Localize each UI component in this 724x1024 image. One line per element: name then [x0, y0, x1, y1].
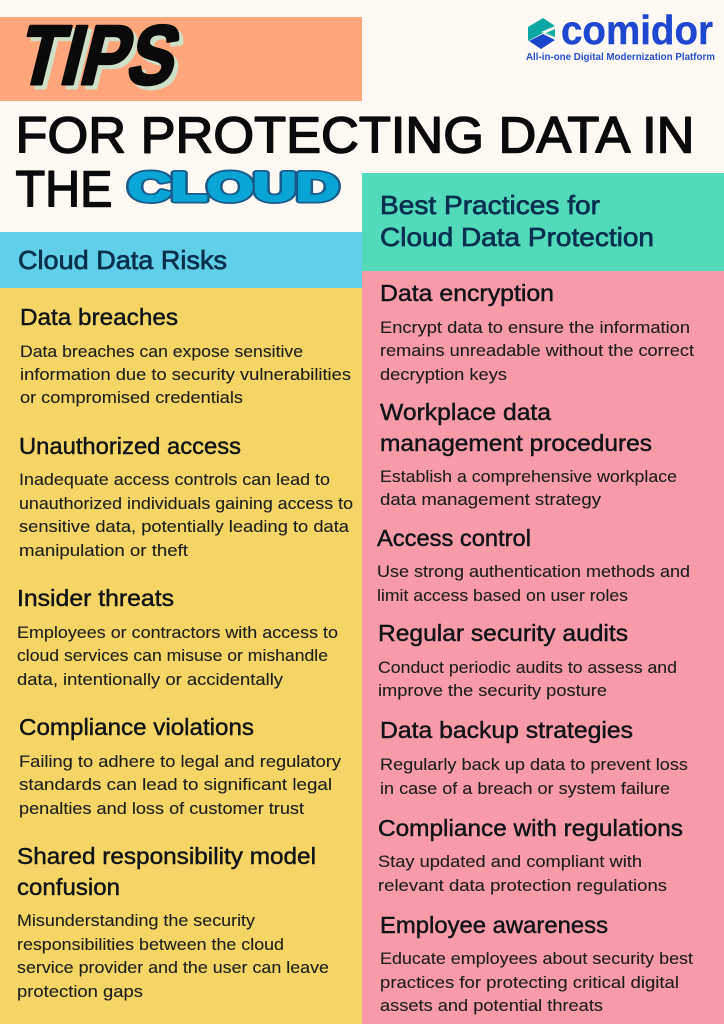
risk: insider threats: data, intentionally or accidentally — [17, 671, 284, 689]
risk: data breaches — [20, 304, 351, 407]
logo: comidor — [526, 7, 715, 63]
risk: unauthorized access: Inadequate access controls can lead to — [19, 471, 330, 489]
risk: insider threats: Insider threats — [17, 585, 174, 611]
risk: shared responsibility model confusion: Shared responsibility model — [17, 843, 316, 869]
risk: unauthorized access: sensitive data, potentially leading to data — [19, 518, 350, 536]
practices heading: Best Practices for — [380, 190, 600, 220]
risk: insider threats — [17, 585, 338, 689]
practice: compliance with regulations: relevant data protection regulations — [378, 877, 667, 895]
risk: insider threats: cloud services can misuse or mishandle — [17, 647, 328, 665]
practice: data backup strategies: Regularly back up data to prevent loss — [380, 756, 688, 774]
risk: data breaches: or compromised credentials — [20, 389, 243, 407]
risk: data breaches: information due to security vulnerabilities — [20, 366, 351, 384]
practice: data encryption — [380, 280, 694, 384]
practices heading: Cloud Data Protection — [380, 222, 654, 252]
practice: compliance with regulations — [378, 815, 683, 895]
risk: shared responsibility model confusion: Misunderstanding the security — [17, 912, 256, 930]
logo: comidor: comidor — [561, 7, 713, 53]
practice: workplace data management procedures — [380, 399, 677, 509]
risk: compliance violations: Compliance violations — [19, 714, 254, 740]
risk: shared responsibility model confusion: responsibilities between the cloud — [17, 936, 284, 954]
practice: data backup strategies: Data backup strategies — [380, 717, 633, 743]
practice: employee awareness: assets and potential threats — [380, 997, 603, 1015]
banner: tips: TIPS — [10, 9, 190, 103]
risk: unauthorized access: unauthorized individuals gaining access to — [19, 495, 353, 513]
risk: unauthorized access — [19, 433, 353, 560]
risk: data breaches: Data breaches — [20, 304, 178, 330]
banner: tips: TIPS — [14, 13, 194, 107]
practice: employee awareness — [380, 912, 693, 1015]
practice: employee awareness: Employee awareness — [380, 912, 608, 938]
panel: best practices — [362, 173, 724, 1024]
risks heading: Cloud Data Risks — [18, 245, 227, 275]
practice: data backup strategies — [380, 717, 688, 798]
risk: data breaches: Data breaches can expose sensitive — [20, 343, 303, 361]
practice: workplace data management procedures: management procedures — [380, 430, 652, 456]
banner: tips — [0, 9, 362, 107]
practice: workplace data management procedures: data management strategy — [380, 491, 602, 509]
risk: compliance violations — [19, 714, 342, 818]
practice: access control: Access control — [377, 525, 531, 551]
title word: cloud — [128, 166, 339, 210]
risk: compliance violations: penalties and loss of customer trust — [19, 800, 304, 818]
practice: data encryption: Encrypt data to ensure the information — [380, 319, 690, 337]
risks heading — [0, 232, 362, 288]
risk: shared responsibility model confusion: protection gaps — [17, 983, 143, 1001]
practice: access control: Use strong authentication methods and — [377, 563, 690, 581]
risk: compliance violations: standards can lead to significant legal — [19, 776, 332, 794]
risk: shared responsibility model confusion: confusion — [17, 874, 120, 900]
title: THE — [16, 160, 112, 218]
practice: workplace data management procedures: Establish a comprehensive workplace — [380, 468, 677, 486]
practice: workplace data management procedures: Workplace data — [380, 399, 551, 425]
title word: cloud: CLOUD — [128, 166, 339, 210]
practice: employee awareness: practices for protecting critical digital — [380, 974, 679, 992]
risk: shared responsibility model confusion: service provider and the user can leave — [17, 959, 329, 977]
practice: data encryption: remains unreadable without the correct — [380, 342, 694, 360]
practice: access control: limit access based on user roles — [377, 587, 628, 605]
title word: cloud: CLOUD — [128, 166, 339, 210]
practice: compliance with regulations: Compliance with regulations — [378, 815, 683, 841]
logo: comidor: All-in-one Digital Modernization Platform — [526, 51, 715, 63]
practice: compliance with regulations: Stay updated and compliant with — [378, 853, 642, 871]
risk: unauthorized access: manipulation or theft — [19, 542, 188, 560]
panel: cloud data risks — [0, 232, 362, 1024]
risk: compliance violations: Failing to adhere to legal and regulatory — [19, 753, 342, 771]
practice: employee awareness: Educate employees about security best — [380, 950, 693, 968]
practice: regular security audits: improve the security posture — [378, 682, 607, 700]
practice: data backup strategies: in case of a breach or system failure — [380, 780, 670, 798]
risk: insider threats: Employees or contractors with access to — [17, 624, 338, 642]
title: FOR PROTECTING DATA IN — [16, 106, 694, 164]
practice: regular security audits: Regular security audits — [378, 620, 628, 646]
risk: shared responsibility model confusion — [17, 843, 329, 1001]
practice: access control — [377, 525, 690, 605]
risk: unauthorized access: Unauthorized access — [19, 433, 241, 459]
practice: data encryption: decryption keys — [380, 366, 507, 384]
practices heading — [362, 173, 724, 271]
practice: regular security audits — [378, 620, 677, 700]
title — [16, 106, 694, 218]
practice: regular security audits: Conduct periodic audits to assess and — [378, 659, 677, 677]
practice: data encryption: Data encryption — [380, 280, 554, 306]
